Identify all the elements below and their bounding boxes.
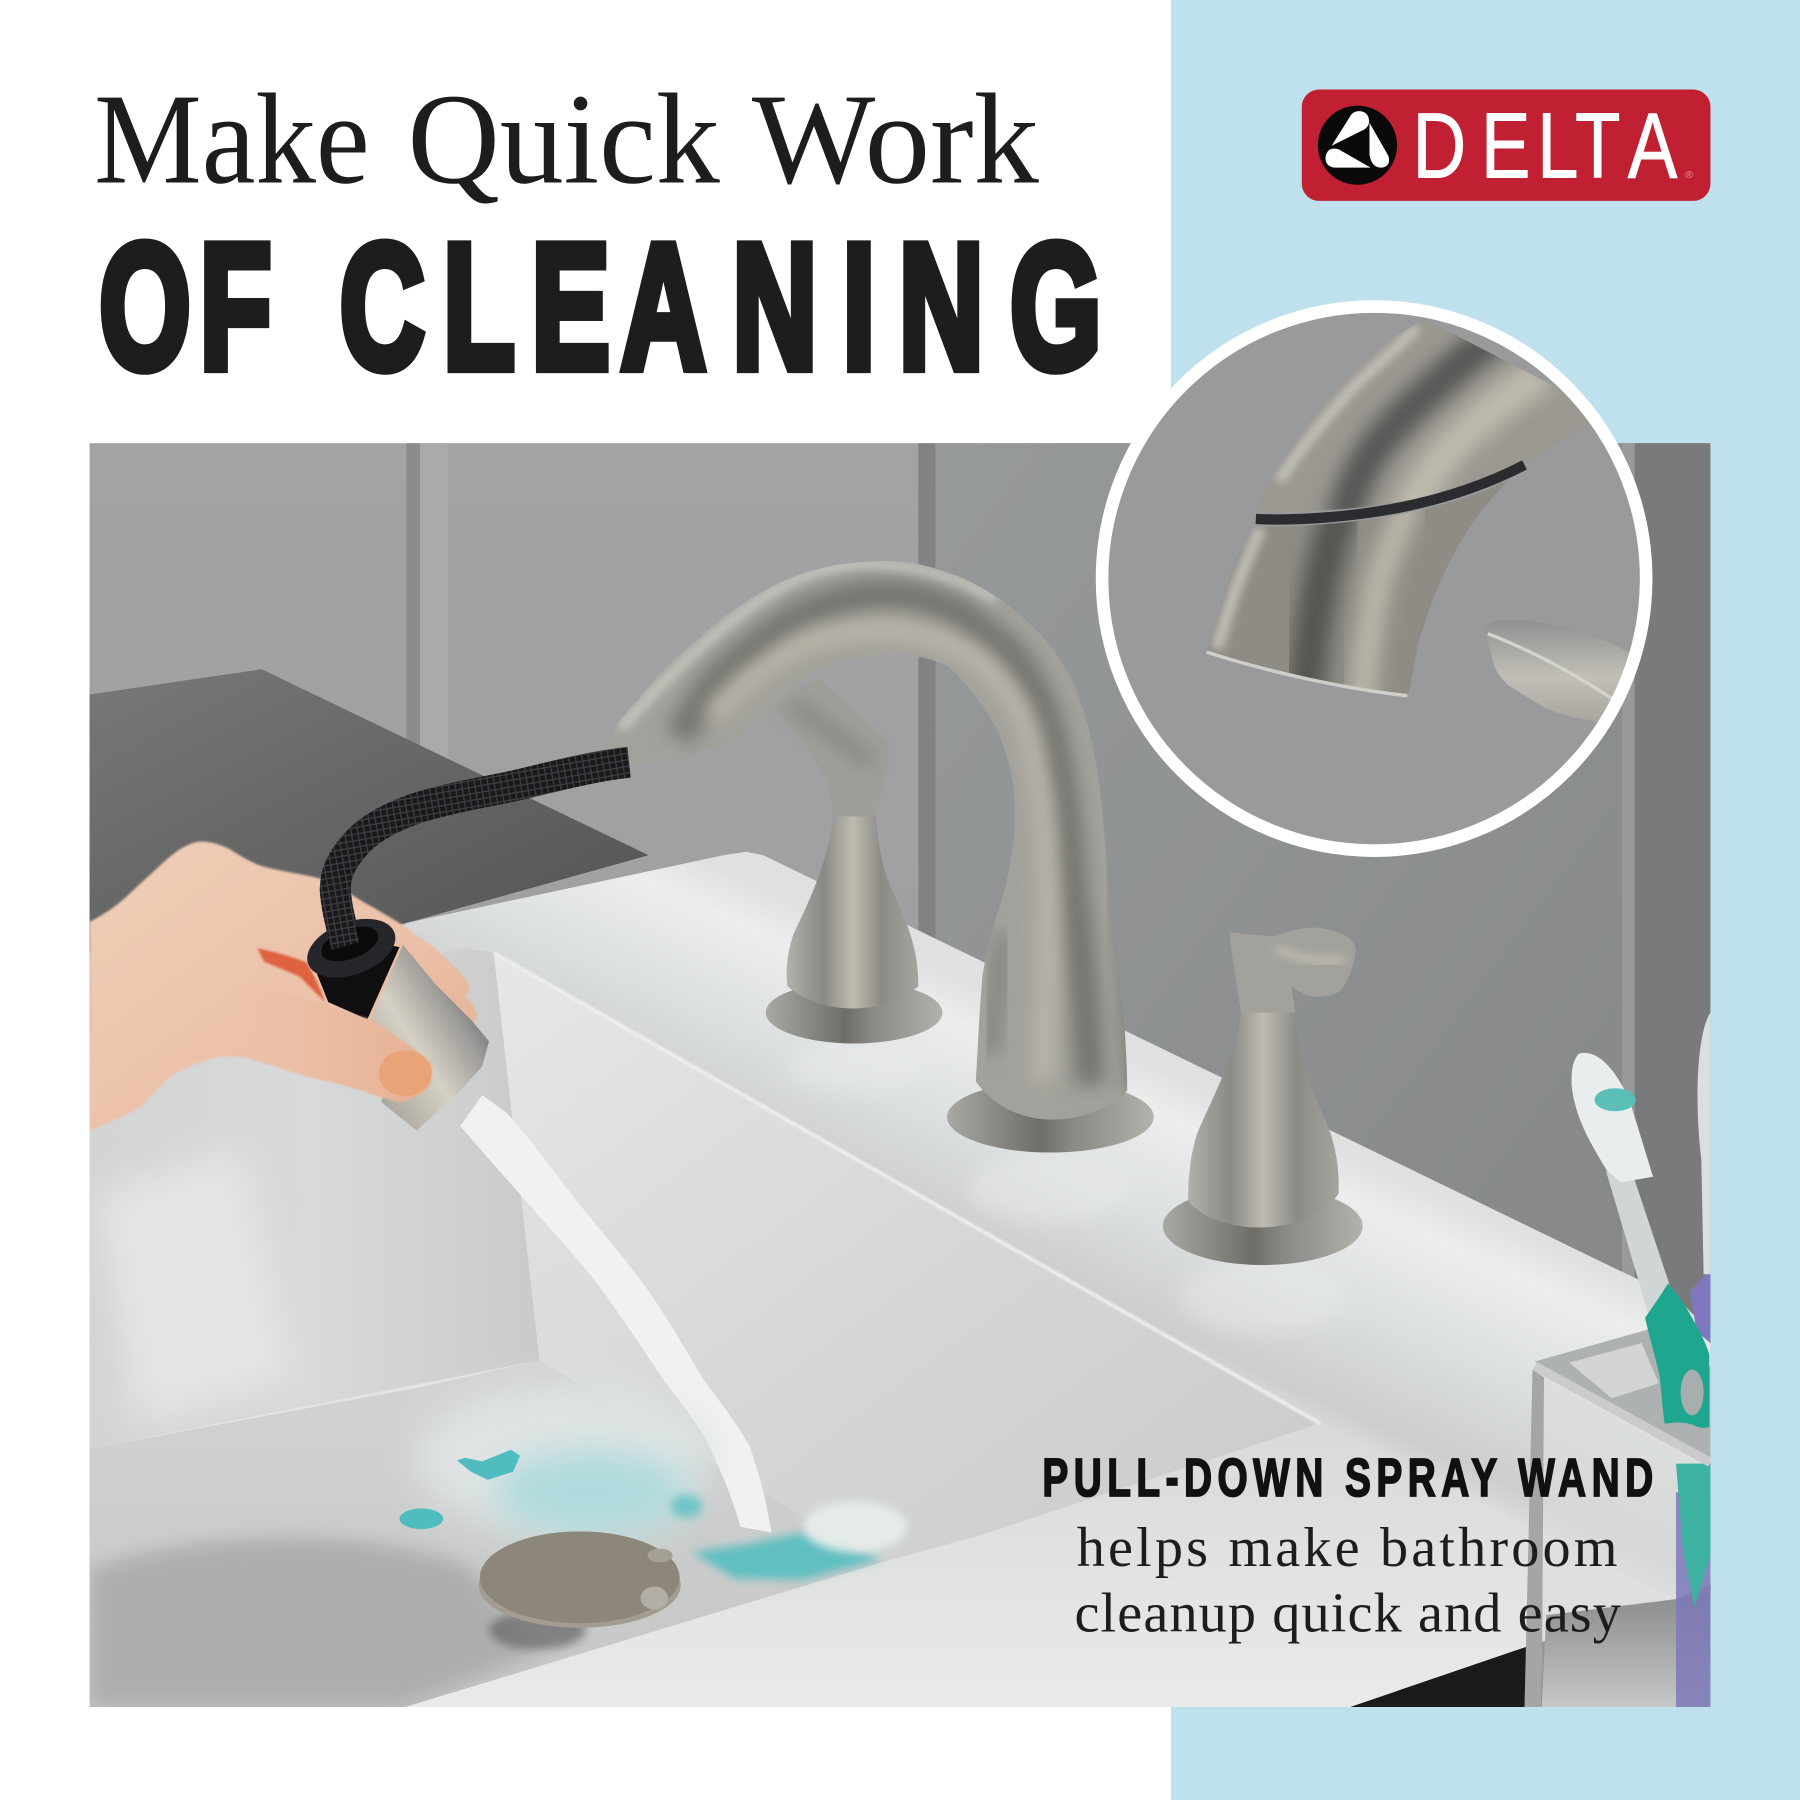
handle [1606, 1171, 1674, 1314]
top opening [1569, 1343, 1659, 1398]
drain stopper [479, 1531, 681, 1650]
lower teal strip [1676, 1464, 1710, 1607]
title line 2: OF CLEANING [99, 207, 1102, 406]
fingernail [379, 1050, 432, 1096]
lever [1229, 928, 1356, 1012]
front rim [406, 1432, 1545, 1707]
logo: Delta [1302, 90, 1710, 201]
logo: Delta: ® [1685, 170, 1693, 181]
caption line 2: cleanup quick and easy [1074, 1582, 1621, 1644]
back wall lighter streak [102, 1160, 280, 1414]
teal toothbrush [1572, 1053, 1710, 1607]
icon: Delta triangle mark [1318, 106, 1397, 185]
wand metal body [371, 945, 489, 1131]
title line 1: Make [94, 68, 370, 212]
faucet left handle [766, 677, 942, 1043]
top face [1535, 1329, 1710, 1460]
sink back wall [90, 948, 540, 1449]
sink inner right wall [494, 953, 1320, 1562]
water splash [804, 1502, 907, 1552]
glass base [1542, 1593, 1710, 1707]
left bar [1524, 1370, 1544, 1707]
zoom callout circle [1096, 298, 1652, 856]
title line 1: Work [752, 68, 1039, 212]
glass body [1542, 1378, 1710, 1707]
dark counter [90, 669, 649, 953]
light blue side panel [1171, 0, 1800, 1800]
water stream [460, 1095, 771, 1533]
circle border [1102, 307, 1646, 851]
flange [766, 990, 942, 1044]
hose entering collar [336, 895, 346, 946]
dark floor below sink [1320, 1584, 1710, 1707]
cone [1188, 1012, 1339, 1228]
faucet spout [585, 551, 1154, 1153]
nozzle rim [1207, 652, 1407, 696]
zoomed spout [1194, 298, 1636, 735]
logo wordmark: DELTA [1412, 93, 1677, 197]
floor shadow [90, 1537, 540, 1707]
rim highlight [494, 953, 1320, 1423]
holder front rim [1535, 1366, 1710, 1462]
spray wand [307, 918, 489, 1131]
finger shadow [257, 948, 325, 1002]
handle ridge [1488, 634, 1630, 712]
collar body [316, 946, 400, 1020]
soap haze [494, 1451, 689, 1534]
braided hose [335, 762, 629, 939]
faucet reflections on deck [980, 1176, 1308, 1327]
purple toothbrush [1676, 1272, 1710, 1707]
lever [774, 677, 889, 816]
bristles [1572, 1053, 1653, 1182]
drain dark gap [489, 1611, 585, 1650]
lever highlight [1277, 948, 1345, 961]
flange [947, 1090, 1154, 1152]
small handle [1484, 620, 1636, 735]
hand [90, 841, 477, 1131]
lever shading [792, 703, 872, 763]
title [94, 68, 1102, 406]
caption line 1: helps make bathroom [1077, 1517, 1617, 1579]
title line 1: Quick [408, 68, 720, 212]
cone [787, 816, 918, 1008]
seam gasket [1256, 465, 1524, 519]
suds foam [413, 1383, 712, 1533]
thumb [230, 986, 432, 1102]
sink floor [90, 1360, 882, 1707]
wall panels [90, 443, 1710, 1464]
arch and body [610, 561, 1128, 1120]
photo: faucet and sink [90, 443, 1710, 1707]
second toothbrush [1698, 1012, 1710, 1274]
toothbrush holder [1524, 1329, 1710, 1707]
caption heading: PULL-DOWN SPRAY WAND [1042, 1446, 1653, 1507]
spout upper section [1240, 298, 1630, 528]
collar ring [299, 908, 403, 989]
faucet right handle [1163, 928, 1363, 1265]
spout lower section [1194, 459, 1527, 735]
teal soap [399, 1450, 882, 1580]
caption text [1042, 1446, 1653, 1644]
teal grip [1645, 1283, 1709, 1428]
sink deck [90, 852, 1710, 1707]
flange [1162, 1199, 1363, 1265]
